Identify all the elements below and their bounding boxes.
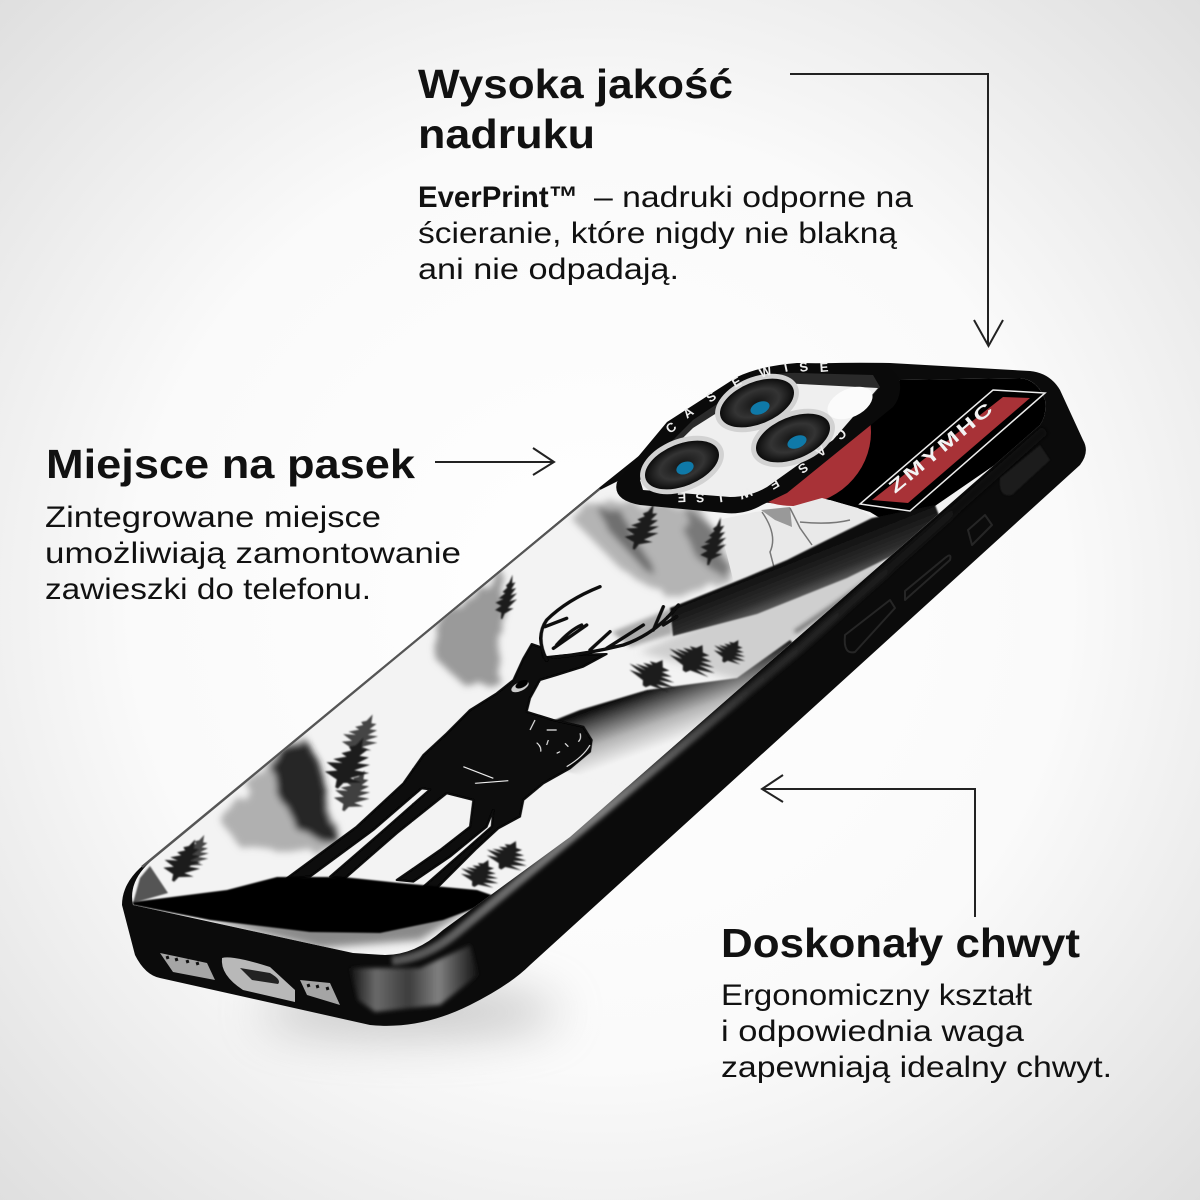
lens left xyxy=(631,424,733,506)
upper ridge xyxy=(670,505,945,636)
right speaker grille xyxy=(300,980,340,1005)
ridge tip xyxy=(612,608,673,647)
artwork base xyxy=(120,360,1070,970)
body text: EverPrint™ xyxy=(418,181,578,214)
flash xyxy=(822,380,878,426)
label text: ZMYMHC xyxy=(885,397,999,497)
body text: Ergonomiczny kształt xyxy=(721,979,1033,1012)
left speaker grille xyxy=(160,953,215,980)
body text: – nadruki odporne na xyxy=(594,181,913,214)
side buttons xyxy=(845,445,1050,652)
body text xyxy=(45,501,461,606)
left edge line xyxy=(142,489,600,867)
hill mist xyxy=(200,905,475,948)
body text: umożliwiają zamontowanie xyxy=(45,537,461,570)
ridge streak xyxy=(795,572,880,632)
lens right xyxy=(742,397,844,479)
ridge haze xyxy=(642,560,886,679)
body text: ścieranie, które nigdy nie blakną xyxy=(418,217,897,250)
heading: Wysoka jakość xyxy=(418,61,733,107)
body text xyxy=(721,979,1112,1084)
lens plate xyxy=(640,384,878,497)
black sky xyxy=(766,378,1046,518)
body text: zawieszki do telefonu. xyxy=(45,573,371,606)
heading: Miejsce na pasek xyxy=(46,441,415,487)
callout: grip xyxy=(721,920,1112,1084)
body text: zapewniają idealny chwyt. xyxy=(721,1051,1112,1084)
label frame xyxy=(860,390,1045,511)
brand text top: CASEWISE xyxy=(663,359,829,436)
camera island xyxy=(616,359,900,513)
red sun xyxy=(768,425,871,506)
mountain peak xyxy=(761,507,792,527)
deer eye xyxy=(511,682,529,692)
trees xyxy=(158,498,753,896)
callout: print quality xyxy=(418,61,913,286)
arrow to case side xyxy=(762,775,975,917)
printed artwork xyxy=(120,358,1070,970)
mountain crease xyxy=(762,508,850,567)
heading xyxy=(418,61,733,157)
arrow to top of case xyxy=(790,74,1003,346)
deer markings xyxy=(463,720,590,783)
body text xyxy=(418,181,913,286)
body text: i odpowiednia waga xyxy=(721,1015,1024,1048)
case body xyxy=(122,363,1086,1026)
phone case xyxy=(120,358,1086,1026)
snowy mountain xyxy=(718,498,873,587)
deer body xyxy=(287,644,607,888)
body text: Zintegrowane miejsce xyxy=(45,501,381,534)
body text: ani nie odpadają. xyxy=(418,253,679,286)
arrow to strap slot xyxy=(435,448,554,475)
antlers xyxy=(541,587,678,660)
island frame xyxy=(616,363,900,513)
deer xyxy=(287,587,678,888)
lens top xyxy=(706,362,808,444)
brand text bottom: CASEWISE xyxy=(677,426,849,506)
callout: strap slot xyxy=(45,441,461,606)
lower ridge xyxy=(550,640,810,790)
red label xyxy=(872,397,1030,503)
ink washes xyxy=(222,498,729,852)
phone shadow xyxy=(260,988,560,1036)
deer pupil xyxy=(515,680,528,688)
charging port xyxy=(222,957,295,1002)
rim highlight xyxy=(392,430,1045,961)
corner wedge xyxy=(133,866,168,903)
heading: nadruku xyxy=(418,111,595,157)
corner highlight xyxy=(350,945,478,1012)
foreground hill xyxy=(133,877,500,933)
heading: Doskonały chwyt xyxy=(721,920,1080,966)
frame bevel xyxy=(640,373,880,497)
